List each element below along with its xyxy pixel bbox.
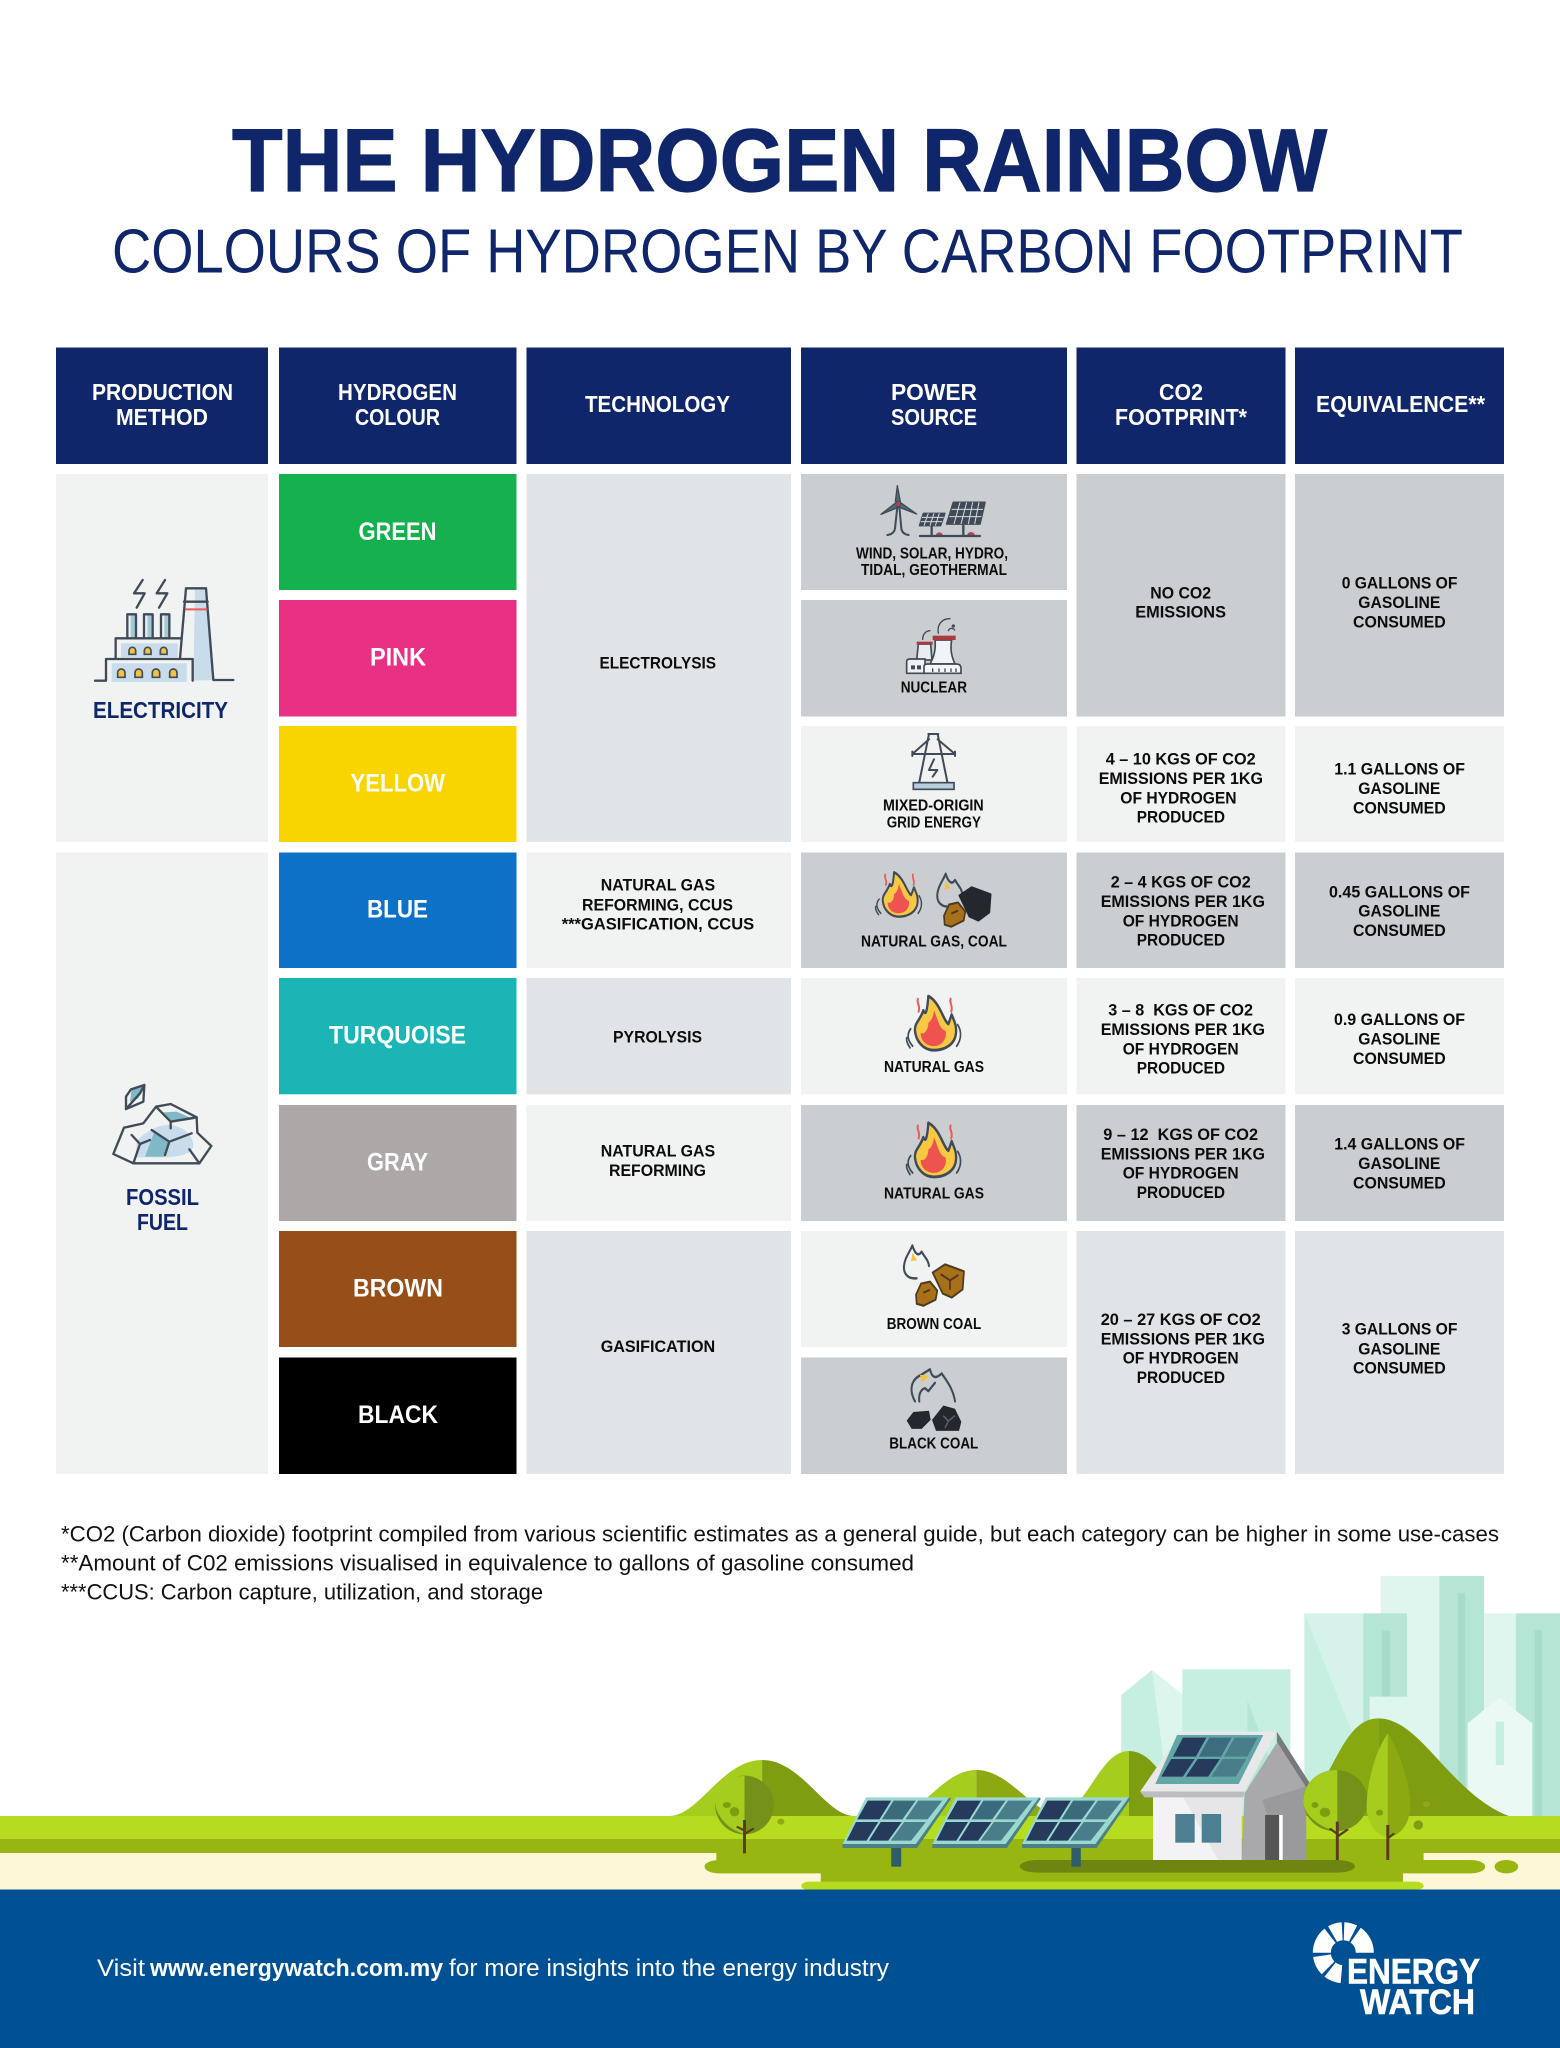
co2: 9-12 kgs: PRODUCED [1137,1183,1225,1202]
solar panel 1 [843,1797,951,1867]
swatch: turquoise [279,978,516,1094]
label: fossil fuel: FOSSIL [126,1184,199,1210]
header: power source: SOURCE [891,404,977,430]
co2: 4-10 kgs: EMISSIONS PER 1KG [1099,769,1263,788]
co2: 2-4 kgs: EMISSIONS PER 1KG [1101,892,1265,911]
co2: 4-10 kgs: OF HYDROGEN [1120,788,1237,807]
co2: 9-12 kgs [1076,1105,1286,1221]
tech: electrolysis [526,474,791,842]
header: production method: PRODUCTION [92,379,233,405]
equivalence: 0 gallons [1295,474,1504,716]
swatch: gray [279,1105,516,1221]
icon: power plant [95,580,233,682]
label: electricity: ELECTRICITY [93,697,228,723]
label: brown coal: BROWN COAL [887,1316,982,1333]
header: hydrogen colour [279,348,516,464]
co2: 20-27 kgs: PRODUCED [1137,1368,1225,1387]
label: wind, solar, hydro, tidal, geothermal: TIDAL, GEOTHERMAL [861,562,1007,579]
tech: natural gas reforming ccus: REFORMING, CCUS [582,895,733,914]
logo: energy watch [1322,1931,1480,2022]
tech: natural gas reforming: NATURAL GAS [601,1142,715,1161]
header: power source: POWER [891,379,977,405]
equivalence: 0 gallons: GASOLINE [1358,593,1440,612]
label: black coal: BLACK COAL [889,1436,979,1452]
equivalence: 1.1 gallons: CONSUMED [1353,798,1446,817]
logo: energy watch: WATCH [1360,1983,1475,2022]
co2: 4-10 kgs: 4 – 10 KGS OF CO2 [1106,749,1256,768]
equivalence: 0.9 gallons: 0.9 GALLONS OF [1334,1010,1465,1029]
equivalence: 1.4 gallons: 1.4 GALLONS OF [1334,1135,1465,1154]
co2: 3-8 kgs [1076,978,1286,1094]
footnotes: **Amount of C02 emissions visualised in equivalence to gallons of gasoline consumed [61,1551,914,1576]
equivalence: 0.45 gallons: CONSUMED [1353,921,1446,940]
footnotes [61,1522,1499,1605]
icon: brown coal [904,1245,964,1306]
swatch: blue: BLUE [367,896,428,924]
swatch: turquoise: TURQUOISE [329,1022,466,1050]
logo: energy watch: ENERGY [1347,1952,1480,1991]
label: wind, solar, hydro, tidal, geothermal: WIND, SOLAR, HYDRO, [856,545,1008,562]
production method: electricity [56,474,268,842]
equivalence: 0.9 gallons: CONSUMED [1353,1049,1446,1068]
production method: fossil fuel [56,852,268,1474]
equivalence column [1295,474,1504,1474]
swatch: yellow: YELLOW [350,770,445,798]
hydrogen colour swatches [279,474,516,1474]
city skyline [1121,1576,1560,1816]
swatch: yellow [279,726,516,842]
co2: 20-27 kgs: 20 – 27 KGS OF CO2 [1101,1310,1261,1329]
tech: pyrolysis [526,978,791,1094]
equivalence: 0.45 gallons [1295,852,1504,968]
hills [669,1718,1509,1816]
illustration: green landscape with city, solar panels and house [0,1576,1560,1890]
co2: 4-10 kgs: PRODUCED [1137,808,1225,827]
co2: 4-10 kgs [1076,726,1286,842]
label: natural gas: NATURAL GAS [884,1186,984,1202]
co2: 3-8 kgs: PRODUCED [1137,1059,1225,1078]
tree: right round [1303,1770,1368,1860]
header: co2 footprint: FOOTPRINT* [1115,404,1247,430]
footer band [0,1890,1560,2048]
solar panel 3 [1022,1797,1131,1867]
equivalence: 1.4 gallons [1295,1105,1504,1221]
footer text [97,1955,890,1982]
co2: no emissions: NO CO2 [1150,583,1211,602]
equivalence: 0.45 gallons: GASOLINE [1358,902,1440,921]
equivalence: 0.9 gallons [1295,978,1504,1094]
label: mixed-origin grid energy [883,798,984,831]
label: wind, solar, hydro, tidal, geothermal [856,545,1008,579]
title: THE HYDROGEN RAINBOW [232,110,1327,210]
footer text: Visit [97,1955,145,1982]
co2: no emissions: EMISSIONS [1135,603,1226,622]
tech: electrolysis: ELECTROLYSIS [600,654,716,672]
power: renewables [801,474,1067,590]
label: nuclear: NUCLEAR [901,680,968,697]
swatch: black: BLACK [358,1401,438,1429]
label: mixed-origin grid energy: MIXED-ORIGIN [883,798,984,815]
equivalence: 0.45 gallons: 0.45 GALLONS OF [1329,882,1470,901]
swatch: pink: PINK [370,644,426,672]
header row [56,348,1504,464]
header: technology [526,348,791,464]
power: natural gas (gray) [801,1105,1067,1221]
icon: nuclear plant [907,619,961,673]
co2: 9-12 kgs: 9 – 12 KGS OF CO2 [1103,1125,1258,1144]
swatch: gray: GRAY [367,1148,428,1176]
header: equivalence [1295,348,1504,464]
co2: 2-4 kgs: 2 – 4 KGS OF CO2 [1111,872,1251,891]
power: mixed-origin grid [801,726,1067,842]
header: power source [801,348,1067,464]
icon: flame [907,1123,961,1177]
label: natural gas: NATURAL GAS [884,1059,984,1076]
co2: 2-4 kgs: PRODUCED [1137,931,1225,950]
ground shapes [705,1852,1518,1882]
header: equivalence: EQUIVALENCE** [1316,391,1485,417]
icon: transmission tower [912,734,955,789]
solar panel 2 [932,1797,1041,1848]
tech: gasification: GASIFICATION [601,1337,715,1356]
equivalence: 0.9 gallons: GASOLINE [1358,1030,1440,1049]
power source column [801,474,1067,1474]
header: technology: TECHNOLOGY [585,391,730,417]
header: co2 footprint [1076,348,1286,464]
equivalence: 1.4 gallons: CONSUMED [1353,1173,1446,1192]
co2: 20-27 kgs: EMISSIONS PER 1KG [1101,1329,1265,1348]
header: hydrogen colour: HYDROGEN [338,379,457,405]
co2: 2-4 kgs [1076,852,1286,968]
label: natural gas, coal: NATURAL GAS, COAL [861,933,1007,950]
tech: natural gas reforming ccus: NATURAL GAS [601,876,715,895]
swatch: brown: BROWN [353,1274,443,1302]
technology column [526,474,791,1474]
label: fossil fuel [126,1184,199,1235]
tech: natural gas reforming: REFORMING [609,1161,706,1180]
tech: pyrolysis: PYROLYSIS [613,1027,702,1046]
equivalence: 3 gallons: CONSUMED [1353,1359,1446,1378]
tech: natural gas reforming [526,1105,791,1221]
equivalence: 3 gallons [1295,1231,1504,1474]
co2: 3-8 kgs: OF HYDROGEN [1123,1039,1239,1058]
swatch: green [279,474,516,590]
footer text: for more insights into the energy industry [449,1955,890,1982]
co2: no emissions [1076,474,1286,716]
tree: right tall [1367,1733,1430,1860]
header: hydrogen colour: COLOUR [355,404,440,430]
co2: 3-8 kgs: EMISSIONS PER 1KG [1101,1020,1265,1039]
co2: 20-27 kgs: OF HYDROGEN [1123,1349,1239,1368]
swatch: brown [279,1231,516,1347]
header: production method [56,348,268,464]
footer text: www.energywatch.com.my [149,1955,443,1982]
equivalence: 0 gallons: CONSUMED [1353,612,1446,631]
tree: left [715,1776,784,1853]
equivalence: 1.4 gallons: GASOLINE [1358,1154,1440,1173]
co2: 3-8 kgs: 3 – 8 KGS OF CO2 [1108,1001,1253,1020]
co2: 20-27 kgs [1076,1231,1286,1474]
co2: 9-12 kgs: EMISSIONS PER 1KG [1101,1144,1265,1163]
header: co2 footprint: CO2 [1159,379,1203,405]
co2: 2-4 kgs: OF HYDROGEN [1123,911,1239,930]
icon: flame [907,996,961,1050]
equivalence: 1.1 gallons [1295,726,1504,842]
icon: flame and coal [876,872,991,927]
equivalence: 3 gallons: 3 GALLONS OF [1342,1320,1457,1339]
co2: 9-12 kgs: OF HYDROGEN [1123,1164,1239,1183]
header: production method: METHOD [116,404,208,430]
power: natural gas, coal [801,852,1067,968]
footnotes: *CO2 (Carbon dioxide) footprint compiled from various scientific estimates as a general guide, but each category can be higher in some use-cases [61,1522,1499,1547]
equivalence: 0 gallons: 0 GALLONS OF [1342,574,1457,593]
label: mixed-origin grid energy: GRID ENERGY [887,814,981,831]
swatch: black [279,1358,516,1474]
house shadow [1020,1860,1355,1873]
label: fossil fuel: FUEL [137,1209,188,1235]
power: nuclear [801,600,1067,716]
swatch: green: GREEN [358,518,436,546]
tech: gasification [526,1231,791,1474]
co2 footprint column [1076,474,1286,1474]
power: natural gas (turquoise) [801,978,1067,1094]
icon: fossil rock [113,1085,211,1163]
power: black coal [801,1358,1067,1474]
equivalence: 1.1 gallons: 1.1 GALLONS OF [1334,759,1465,778]
tech: natural gas reforming ccus [526,852,791,968]
equivalence: 3 gallons: GASOLINE [1358,1339,1440,1358]
house [1140,1732,1312,1860]
equivalence: 1.1 gallons: GASOLINE [1358,779,1440,798]
swatch: pink [279,600,516,716]
swatch: blue [279,852,516,968]
tech: natural gas reforming ccus: ***GASIFICATION, CCUS [562,915,754,934]
icon: wind turbine and solar panels [881,486,985,536]
power: brown coal [801,1231,1067,1347]
icon: black coal [907,1369,961,1431]
footnotes: ***CCUS: Carbon capture, utilization, and storage [61,1580,543,1605]
